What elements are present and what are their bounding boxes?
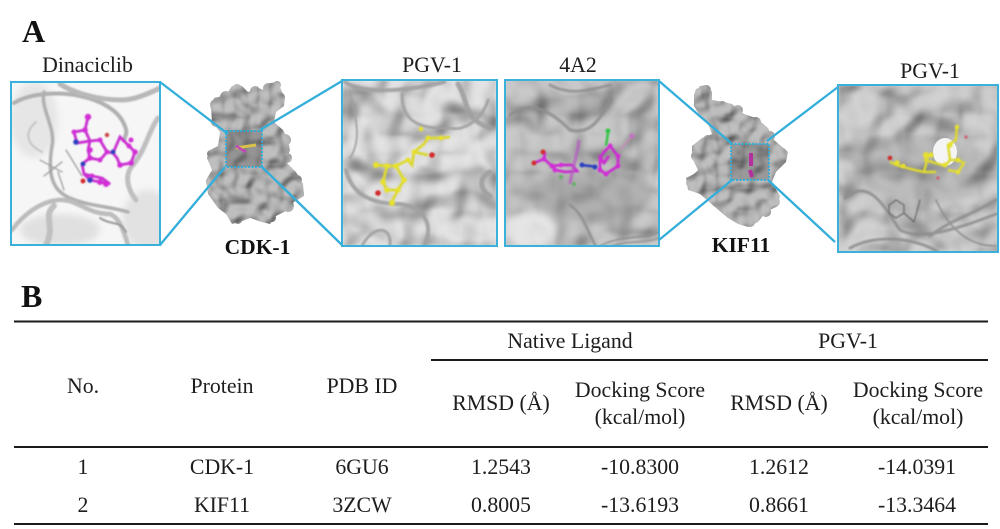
table row: KIF11: 2	[78, 493, 88, 517]
table row: KIF11: 0.8005	[471, 493, 531, 517]
table header: Native Ligand	[507, 329, 633, 353]
table header	[67, 329, 983, 429]
panel: Dinaciclib binding site	[10, 56, 161, 246]
panel: PGV-1 in KIF11	[838, 59, 998, 252]
callout: CDK-1 zoom lines	[160, 81, 342, 245]
table header: Docking Score	[575, 378, 705, 402]
heading: 4A2: 4A2	[559, 53, 597, 77]
table row: CDK-1: -10.8300	[601, 455, 679, 479]
ligand: 4A2 (magenta)	[532, 128, 634, 186]
table row: KIF11: KIF11	[194, 493, 250, 517]
ligand in CDK-1 pocket	[236, 145, 256, 148]
table row: CDK-1: CDK-1	[190, 455, 254, 479]
protein label: CDK-1: CDK-1	[225, 235, 290, 259]
ligand in KIF11 pocket	[750, 153, 752, 177]
table header: Docking Score	[853, 378, 983, 402]
table header: RMSD (Å)	[730, 391, 828, 415]
table row: KIF11: -13.6193	[601, 493, 679, 517]
table header: (kcal/mol)	[873, 405, 963, 429]
table header: Protein	[191, 374, 254, 398]
heading: PGV-1: PGV-1	[900, 59, 960, 83]
table row: KIF11	[78, 493, 956, 517]
table row: CDK-1: -14.0391	[878, 455, 956, 479]
table row: KIF11: 0.8661	[749, 493, 809, 517]
heading: Dinaciclib: Dinaciclib	[42, 53, 133, 77]
panel: 4A2 in KIF11	[504, 53, 659, 248]
table header: RMSD (Å)	[452, 391, 550, 415]
panel label B: B	[21, 278, 42, 314]
table header: No.	[67, 374, 99, 398]
protein surface: CDK-1	[206, 81, 304, 224]
table row: CDK-1: 6GU6	[335, 455, 389, 479]
panel label A: A	[22, 13, 45, 49]
heading: PGV-1: PGV-1	[402, 53, 462, 77]
callout: KIF11 zoom lines	[659, 81, 838, 242]
ligand: PGV-1 (yellow)	[373, 127, 450, 206]
table row: KIF11: 3ZCW	[332, 493, 392, 517]
table row: CDK-1: 1.2543	[471, 455, 531, 479]
table header: (kcal/mol)	[595, 405, 685, 429]
protein surface: KIF11	[686, 85, 788, 227]
table row: CDK-1	[78, 455, 956, 479]
protein label: KIF11: KIF11	[712, 233, 770, 257]
panel: PGV-1 in CDK-1	[342, 53, 497, 246]
table row: CDK-1: 1.2612	[749, 455, 809, 479]
table row: CDK-1: 1	[78, 455, 88, 479]
ligand: Dinaciclib (magenta)	[72, 114, 138, 187]
table header: PGV-1	[818, 329, 878, 353]
table header: PDB ID	[327, 374, 397, 398]
ligand: PGV-1 (yellow)	[888, 125, 968, 180]
table row: KIF11: -13.3464	[878, 493, 956, 517]
table: docking results	[14, 322, 988, 524]
